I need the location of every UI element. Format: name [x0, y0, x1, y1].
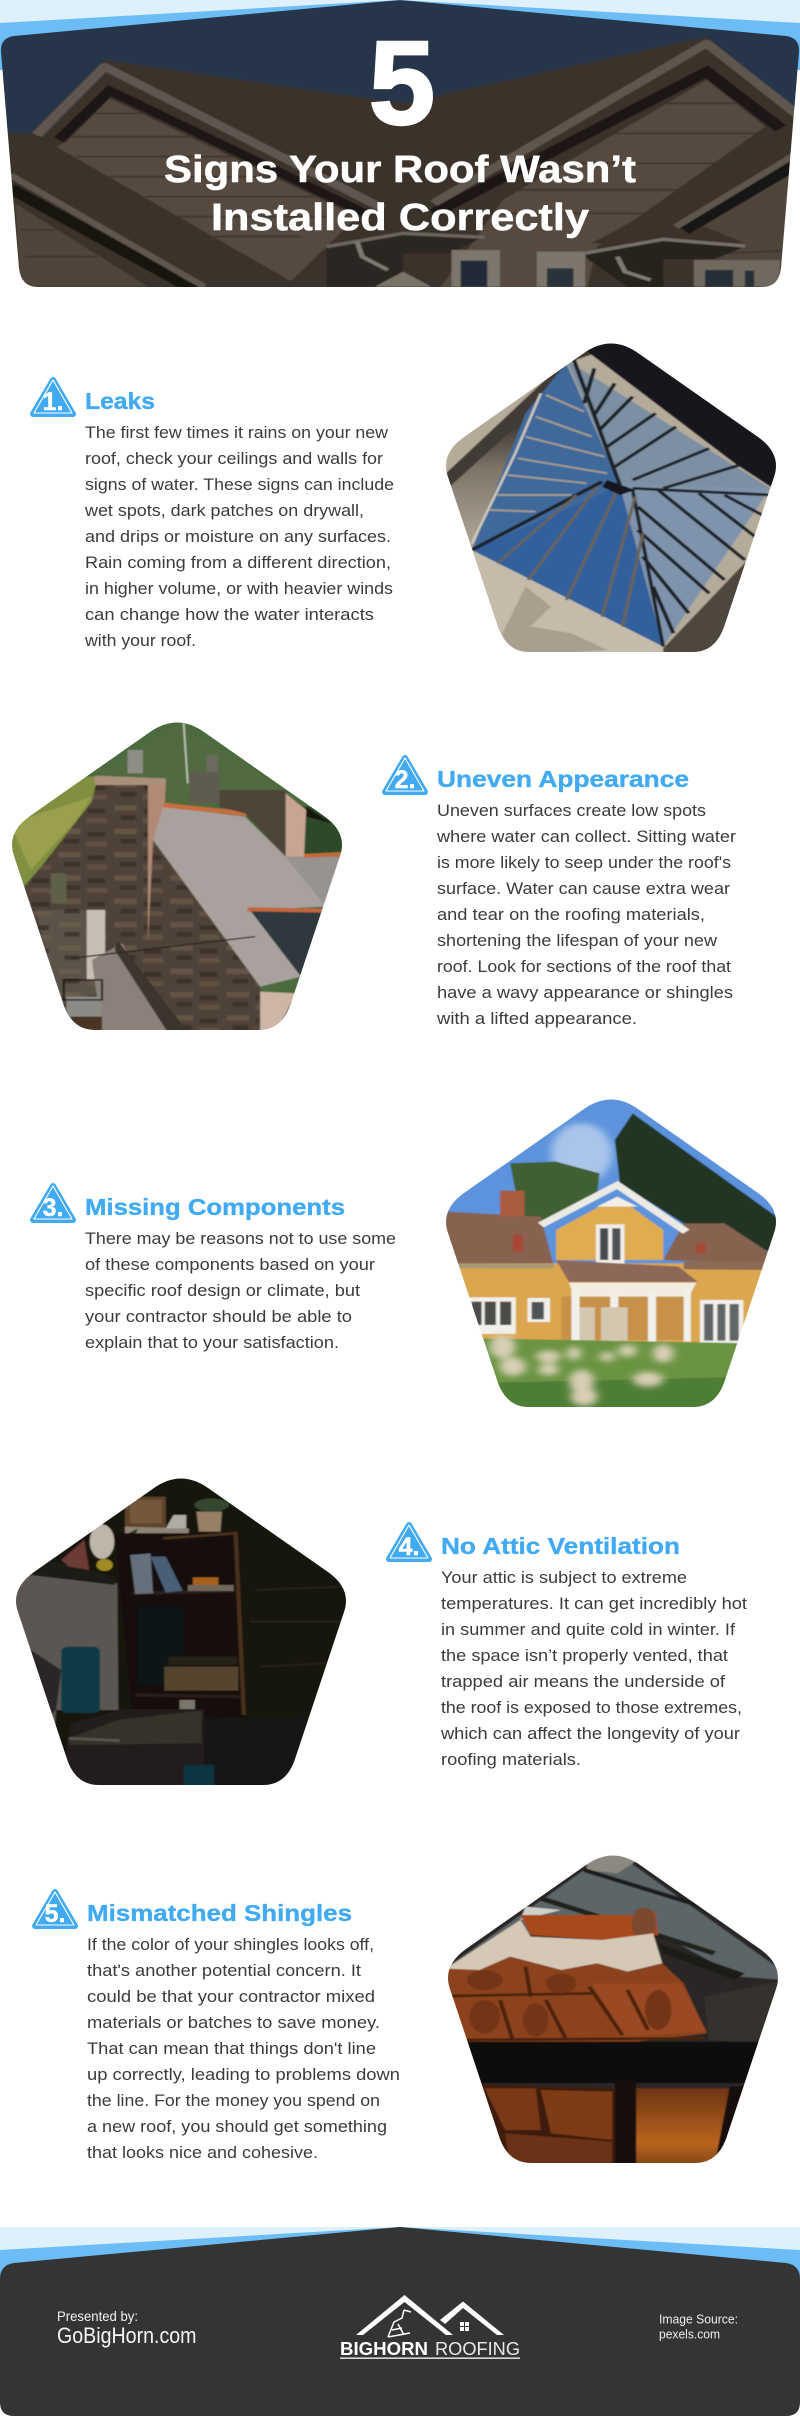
text block: signs of water. These signs can include — [85, 476, 394, 494]
photo: skylight pentagon — [439, 340, 786, 657]
text block: which can affect the longevity of your — [440, 1725, 741, 1743]
icon: number 5 triangle: 5. — [45, 1900, 65, 1928]
footer text: image source: Image Source: — [659, 2312, 738, 2326]
title: 5 — [369, 17, 435, 150]
text block: the space isn’t properly vented, that — [441, 1647, 728, 1665]
icon: number 1 triangle: 1. — [43, 388, 63, 416]
text block: specific roof design or climate, but — [85, 1282, 360, 1300]
text block: and drips or moisture on any surfaces. — [85, 528, 391, 546]
text block: where water can collect. Sitting water — [436, 828, 737, 846]
text block — [84, 424, 394, 650]
logo: bighorn roofing: BIGHORN — [340, 2338, 428, 2359]
photo: terracotta tiles pentagon — [439, 1850, 791, 2167]
text block: with your roof. — [84, 632, 196, 650]
heading: No Attic Ventilation — [441, 1533, 680, 1559]
text block: can change how the water interacts — [85, 606, 374, 624]
text block — [440, 1569, 747, 1769]
icon: number 3 triangle — [33, 1186, 73, 1222]
text block: Your attic is subject to extreme — [441, 1569, 687, 1587]
title: Signs Your Roof Wasn’t — [164, 149, 636, 191]
heading: Leaks — [85, 388, 155, 414]
text block — [87, 1936, 400, 2162]
text block: the roof is exposed to those extremes, — [441, 1699, 742, 1717]
text block: with a lifted appearance. — [436, 1010, 637, 1028]
text block: Uneven surfaces create low spots — [437, 802, 706, 820]
text block: wet spots, dark patches on drywall, — [84, 502, 364, 520]
text block: up correctly, leading to problems down — [87, 2066, 400, 2084]
text block: Rain coming from a different direction, — [85, 554, 391, 572]
text block: If the color of your shingles looks off, — [87, 1936, 374, 1954]
text block: shortening the lifespan of your new — [437, 932, 717, 950]
footer text: image source: pexels.com — [659, 2326, 720, 2342]
text block: There may be reasons not to use some — [85, 1230, 396, 1248]
icon: number 3 triangle: 3. — [43, 1194, 63, 1222]
text block: roof. Look for sections of the roof that — [437, 958, 731, 976]
photo: yellow house pentagon — [439, 1097, 786, 1413]
text block: explain that to your satisfaction. — [85, 1334, 339, 1352]
text block: the line. For the money you spend on — [87, 2092, 380, 2110]
text block: could be that your contractor mixed — [87, 1988, 375, 2006]
text block: That can mean that things don't line — [87, 2040, 376, 2058]
logo: bighorn roofing: ROOFING — [435, 2338, 520, 2359]
text block: is more likely to seep under the roof's — [437, 854, 731, 872]
text block: roofing materials. — [441, 1751, 581, 1769]
photo: dark attic pentagon — [16, 1478, 346, 1785]
panel: 2 uneven appearance — [0, 717, 737, 1033]
icon: number 4 triangle — [389, 1525, 429, 1561]
text block: a new roof, you should get something — [87, 2118, 387, 2136]
text block: that looks nice and cohesive. — [87, 2144, 318, 2162]
footer text: presented by: GoBigHorn.com — [57, 2323, 196, 2348]
text block: in summer and quite cold in winter. If — [441, 1621, 735, 1639]
text block: your contractor should be able to — [85, 1308, 352, 1326]
photo: stone house pentagon — [12, 722, 342, 1030]
text block — [85, 1230, 396, 1352]
title — [164, 17, 636, 239]
text block: materials or batches to save money. — [87, 2014, 380, 2032]
panel: 3 missing components — [33, 1097, 786, 1413]
panel: 4 no attic ventilation — [0, 1477, 747, 1793]
icon: number 2 triangle: 2. — [395, 766, 415, 794]
text block: trapped air means the underside of — [441, 1673, 725, 1691]
footer panel — [0, 2227, 800, 2416]
text block — [436, 802, 737, 1028]
text block: have a wavy appearance or shingles — [437, 984, 733, 1002]
heading: Mismatched Shingles — [87, 1900, 352, 1926]
panel: 5 mismatched shingles — [35, 1850, 791, 2167]
icon: number 2 triangle — [385, 758, 425, 794]
footer text: presented by: Presented by: — [57, 2308, 138, 2324]
footer band — [0, 2227, 800, 2290]
icon: number 5 triangle — [35, 1892, 75, 1928]
text block: The first few times it rains on your new — [85, 424, 388, 442]
logo: bighorn roofing — [340, 2295, 520, 2359]
icon: number 1 triangle — [33, 380, 73, 416]
text block: that's another potential concern. It — [87, 1962, 361, 1980]
header band — [0, 0, 800, 70]
text block: in higher volume, or with heavier winds — [85, 580, 393, 598]
footer text: presented by — [57, 2308, 196, 2348]
text block: surface. Water can cause extra wear — [437, 880, 731, 898]
heading: Missing Components — [85, 1194, 345, 1220]
title: Installed Correctly — [211, 197, 589, 239]
text block: temperatures. It can get incredibly hot — [441, 1595, 747, 1613]
hero photo: roof gables — [0, 0, 800, 295]
footer text: image source — [659, 2312, 738, 2342]
panel: 1 leaks — [33, 340, 786, 657]
text block: and tear on the roofing materials, — [437, 906, 705, 924]
text block: of these components based on your — [85, 1256, 376, 1274]
text block: roof, check your ceilings and walls for — [85, 450, 384, 468]
icon: number 4 triangle: 4. — [399, 1533, 419, 1561]
heading: Uneven Appearance — [437, 766, 689, 792]
